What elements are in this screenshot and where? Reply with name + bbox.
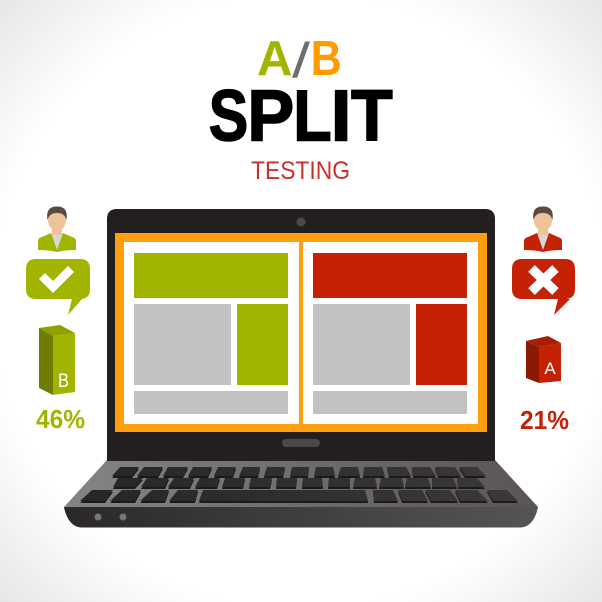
title: SPLIT xyxy=(209,76,393,156)
icon: green person xyxy=(38,206,76,252)
laptop front edge xyxy=(64,507,538,528)
orange screen frame xyxy=(115,233,487,432)
stat: 46%: 46% xyxy=(36,404,85,434)
laptop lights xyxy=(94,514,126,520)
stat: 21%: 21% xyxy=(520,405,569,435)
title: A/B xyxy=(257,32,342,88)
laptop xyxy=(64,209,538,528)
title: SPLIT: I xyxy=(330,76,352,156)
icon: red box A xyxy=(526,336,561,383)
icon: red box A: A xyxy=(544,359,556,378)
title: SPLIT: L xyxy=(293,76,332,156)
icon: red person xyxy=(524,206,562,252)
hinge pill xyxy=(282,439,320,447)
subtitle: TESTING: TESTING xyxy=(251,157,350,185)
title: A/B: A xyxy=(257,32,292,86)
camera xyxy=(296,218,306,226)
laptop screen bezel xyxy=(107,209,495,461)
title: SPLIT: P xyxy=(247,76,294,156)
title: SPLIT: S xyxy=(209,76,248,156)
panel: variant B page xyxy=(124,242,299,424)
icon: green box B xyxy=(39,325,75,395)
laptop deck xyxy=(64,460,538,507)
title: A/B: / xyxy=(292,34,310,88)
icon: green box B: B xyxy=(58,371,69,392)
icon: cross speech bubble xyxy=(512,259,575,315)
title: A/B: B xyxy=(311,32,342,86)
panel: variant A page xyxy=(303,242,478,424)
icon: check speech bubble xyxy=(26,259,90,315)
keyboard xyxy=(80,467,518,503)
title: SPLIT: T xyxy=(351,76,393,156)
